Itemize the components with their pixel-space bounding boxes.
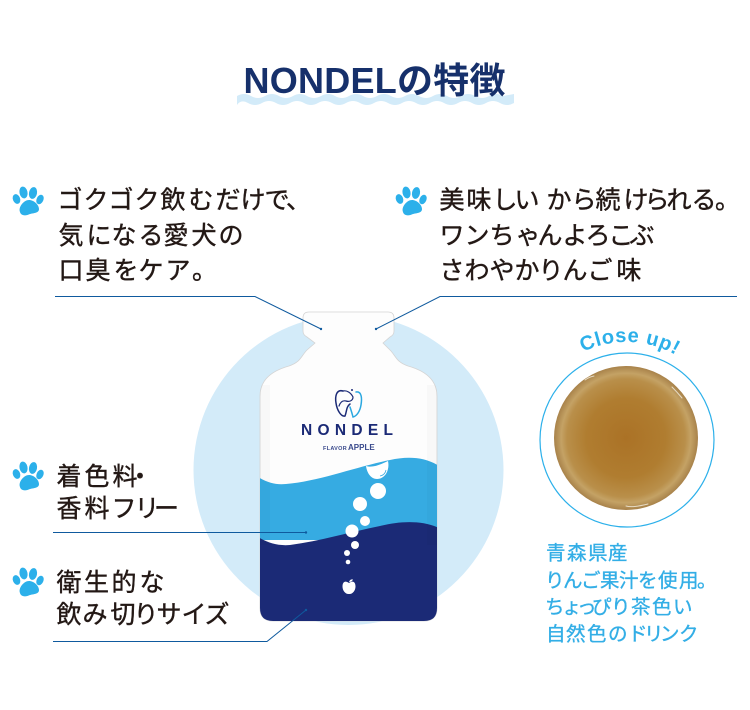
- pouch waves: [260, 458, 437, 621]
- drink photo: [554, 366, 698, 510]
- feature text: 飲み切りサイズ: [56, 601, 230, 629]
- close up description: 自然色のドリンク: [546, 624, 699, 646]
- feature text: ゴクゴク飲むだけで、: [58, 186, 311, 214]
- feature text: 着色料・: [56, 463, 153, 491]
- leader lines: [53, 296, 737, 642]
- close up description: ちょっぴり茶色い: [545, 596, 693, 618]
- feature text: ワンちゃんよろこぶ: [440, 222, 655, 250]
- pouch logo: [301, 389, 393, 452]
- close up panel: Close up!: [580, 331, 680, 354]
- product pouch: [258, 312, 439, 623]
- icon: paw: [11, 461, 45, 490]
- flavor label: FLAVOR: [323, 446, 347, 452]
- close up ring: [540, 353, 714, 527]
- bubbles: [344, 461, 388, 564]
- close up panel: [539, 331, 715, 528]
- feature: tasty apple flavour: [394, 186, 740, 285]
- brand name: NONDEL: [301, 422, 393, 439]
- background circle behind pouch: [194, 315, 504, 625]
- feature text: 美味しいから続けられる。: [440, 186, 740, 214]
- close up description: りんご果汁を使用。: [545, 570, 717, 592]
- feature: hygienic single-use size: [11, 567, 230, 629]
- feature text: さわやかりんご味: [440, 257, 642, 285]
- title wave underline: [237, 94, 514, 105]
- feature text: 気になる愛犬の: [58, 222, 244, 250]
- icon: tooth with dog: [336, 389, 361, 417]
- icon: paw: [394, 186, 428, 215]
- close up label: [583, 342, 690, 365]
- feature: gulp and breath care: [11, 186, 311, 285]
- icon: apple: [342, 579, 356, 594]
- feature text: 衛生的な: [56, 569, 165, 597]
- title: [237, 60, 514, 105]
- pouch body: [260, 312, 437, 621]
- feature text: 口臭をケア。: [58, 257, 217, 285]
- icon: paw: [11, 567, 45, 596]
- close up description: 青森県産: [546, 542, 628, 564]
- icon: paw: [11, 186, 45, 215]
- feature text: 香料フリー: [56, 495, 179, 523]
- drink highlights: [585, 376, 682, 507]
- flavor label: APPLE: [348, 443, 375, 452]
- title text: NONDELの特徴: [244, 60, 506, 101]
- feature: no colouring or flavouring: [11, 461, 179, 523]
